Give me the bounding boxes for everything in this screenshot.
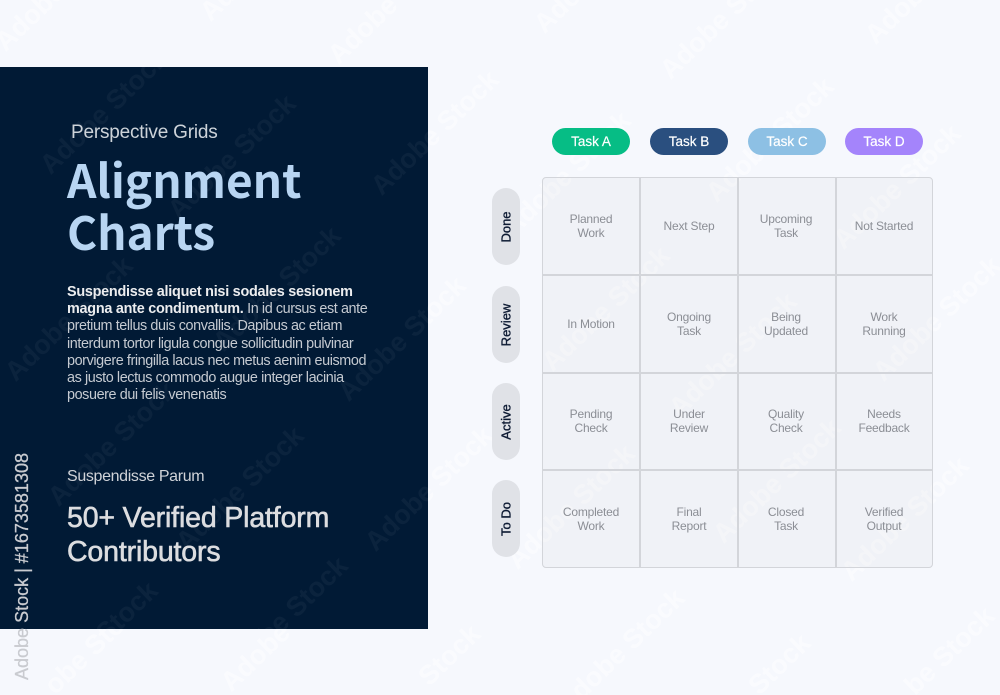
cell: Verified Output: Output — [867, 519, 901, 533]
cell: Pending Check — [570, 407, 612, 435]
body text — [67, 284, 368, 403]
row label: To Do: To Do — [498, 502, 514, 535]
row label: To Do — [492, 480, 520, 557]
watermark pattern: Adobe Stock — [536, 240, 676, 377]
panel: dark intro: Adobe Stock — [42, 375, 182, 512]
cell: Planned Work: Work — [578, 226, 604, 240]
watermark pattern: Adobe Stock — [332, 270, 472, 407]
cell: Verified Output — [864, 505, 903, 533]
title — [66, 146, 301, 264]
cell: Not Started: Not Started — [855, 219, 913, 233]
cell: Quality Check: Quality — [768, 407, 804, 421]
cell: Needs Feedback: Needs — [867, 407, 901, 421]
cell: Work Running: Running — [862, 324, 906, 338]
column header: Task B — [650, 128, 728, 155]
cell: Final Report: Final — [676, 505, 702, 519]
title: Alignment — [67, 146, 301, 212]
cell: Final Report — [672, 505, 706, 533]
subtitle: Perspective Grids — [71, 122, 218, 143]
column header: Task C — [748, 128, 826, 155]
stat heading: Contributors — [67, 536, 220, 568]
cell: Verified Output: Verified — [865, 505, 903, 519]
cell: Ongoing Task: Task — [677, 324, 701, 338]
column header: Task B: Task B — [669, 134, 709, 149]
cell: Planned Work: Planned — [570, 212, 612, 226]
cell: Ongoing Task — [667, 310, 711, 338]
column header: Task A — [552, 128, 630, 155]
cell: Work Running — [862, 310, 906, 338]
row label: Active: Active — [498, 404, 514, 439]
column header: Task D: Task D — [863, 134, 905, 149]
watermark pattern: Adobe Stock — [215, 560, 355, 695]
watermark pattern: Adobe Stock — [497, 105, 637, 242]
cell: Work Running: Work — [870, 310, 897, 324]
cell: Needs Feedback — [858, 407, 910, 435]
watermark pattern: Adobe Stock — [707, 412, 847, 549]
cell: Upcoming Task: Upcoming — [760, 212, 812, 226]
cell: Under Review — [670, 407, 708, 435]
cell: Completed Work: Work — [578, 519, 604, 533]
panel: dark intro — [0, 67, 428, 629]
watermark pattern: Adobe Stock — [365, 64, 505, 201]
cell: Upcoming Task: Task — [774, 226, 798, 240]
cell: Closed Task: Closed — [768, 505, 804, 519]
watermark pattern: Adobe Stock — [501, 438, 641, 575]
cell: Next Step: Next Step — [664, 219, 714, 233]
column header: Task C: Task C — [766, 134, 808, 149]
cell: Being Updated — [764, 310, 808, 338]
watermark pattern: Adobe Stock — [359, 420, 499, 557]
cell: Quality Check: Check — [769, 421, 802, 435]
cell: Completed Work: Completed — [563, 505, 619, 519]
column header: Task A: Task A — [571, 134, 611, 149]
watermark pattern: Adobe Stock — [827, 118, 967, 255]
row label: Active — [492, 383, 520, 460]
cell: In Motion: In Motion — [567, 317, 615, 331]
cell: Being Updated: Updated — [764, 324, 808, 338]
cell: Closed Task: Task — [774, 519, 798, 533]
cell: Closed Task — [768, 505, 804, 533]
stat heading — [67, 502, 329, 568]
stat label: Suspendisse Parum — [67, 468, 204, 485]
cell: Planned Work — [570, 212, 612, 240]
watermark pattern: Adobe Stock — [700, 71, 840, 208]
vertical stock credit: Adobe Stock | #1673581308 — [12, 453, 32, 680]
cell: Being Updated: Being — [771, 310, 801, 324]
body text: Suspendisse aliquet nisi sodales sesionem — [67, 284, 353, 300]
body text: as justo lectus commodo augue integer lacinia — [67, 370, 344, 386]
alignment grid — [542, 177, 933, 568]
cell: Needs Feedback: Feedback — [858, 421, 910, 435]
cell: Pending Check: Check — [574, 421, 608, 435]
cell: Final Report: Report — [672, 519, 706, 533]
column header: Task D — [845, 128, 923, 155]
body text: magna ante condimentum. In id cursus est ante — [67, 301, 367, 317]
row label: Review — [492, 286, 520, 363]
row label: Done: Done — [498, 211, 514, 242]
body text: pretium tellus duis convallis. Dapibus ac etiam — [67, 318, 342, 334]
cell: Under Review: Under — [673, 407, 705, 421]
watermark pattern: Adobe Stock — [663, 286, 803, 423]
cell: Quality Check — [768, 407, 804, 435]
watermark pattern: Adobe Stock — [835, 450, 975, 587]
body text: porvigere fringilla lacus nec metus aenim euismod — [67, 353, 366, 369]
row label: Done — [492, 188, 520, 265]
panel: dark intro: Adobe Stock — [170, 420, 310, 557]
body text: posuere dui felis venenatis — [67, 387, 226, 403]
cell: Ongoing Task: Ongoing — [667, 310, 711, 324]
cell: Completed Work — [563, 505, 619, 533]
panel: dark intro: Adobe Stock — [0, 250, 139, 387]
cell: Upcoming Task — [760, 212, 812, 240]
title: Charts — [67, 198, 215, 264]
body text: interdum tortor ligula congue sollicitudin pulvinar — [67, 336, 353, 352]
panel: dark intro: Adobe Stock — [162, 88, 302, 225]
panel: dark intro: Adobe Stock — [207, 220, 347, 357]
cell: Pending Check: Pending — [570, 407, 612, 421]
cell: Under Review: Review — [670, 421, 708, 435]
row label: Review: Review — [498, 303, 514, 346]
watermark pattern: Stock — [412, 618, 487, 691]
stat heading: 50+ Verified Platform — [67, 502, 329, 534]
